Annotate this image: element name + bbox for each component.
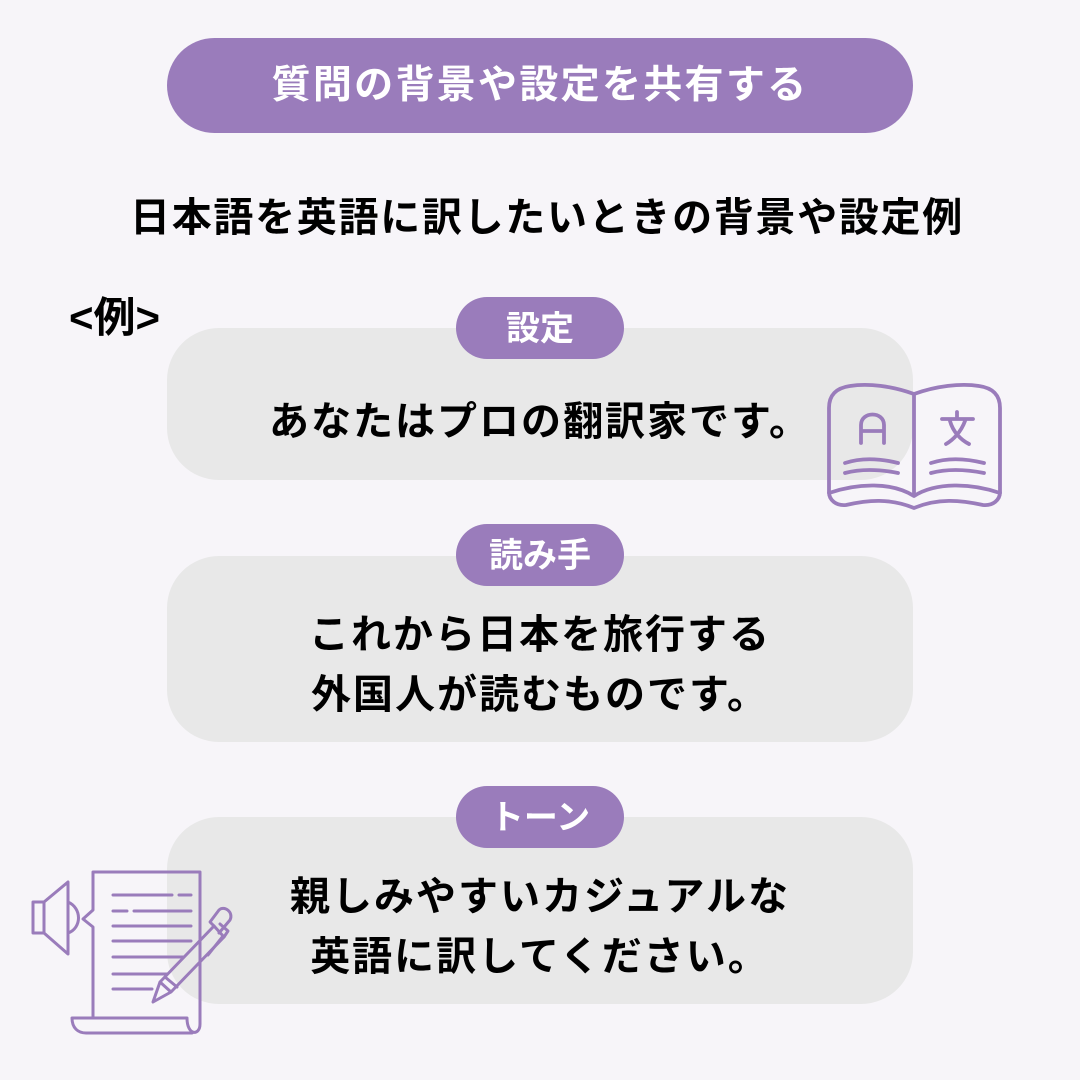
tone text: 親しみやすいカジュアルな <box>290 875 790 919</box>
setting pill <box>456 297 624 359</box>
panel: setting <box>167 297 913 480</box>
tone text <box>290 875 790 979</box>
setting card background <box>167 328 913 480</box>
title banner: 質問の背景や設定を共有する <box>272 64 808 107</box>
tone text: 英語に訳してください。 <box>310 935 770 979</box>
reader text <box>309 613 771 717</box>
setting text: あなたはプロの翻訳家です。 <box>269 400 811 444</box>
example label: <例> <box>69 294 160 341</box>
reader pill: 読み手 <box>489 537 591 575</box>
setting pill: 設定 <box>506 310 574 348</box>
tone pill <box>456 786 624 848</box>
panel: tone <box>167 786 913 1004</box>
reader text: これから日本を旅行する <box>309 613 771 657</box>
subtitle: 日本語を英語に訳したいときの背景や設定例 <box>130 196 964 240</box>
panel: reader <box>167 524 913 742</box>
tone pill: トーン <box>490 799 590 837</box>
reader text: 外国人が読むものです。 <box>311 673 769 717</box>
title banner <box>167 38 913 133</box>
tone card background <box>167 817 913 1004</box>
reader card background <box>167 556 913 742</box>
reader pill <box>456 524 624 586</box>
